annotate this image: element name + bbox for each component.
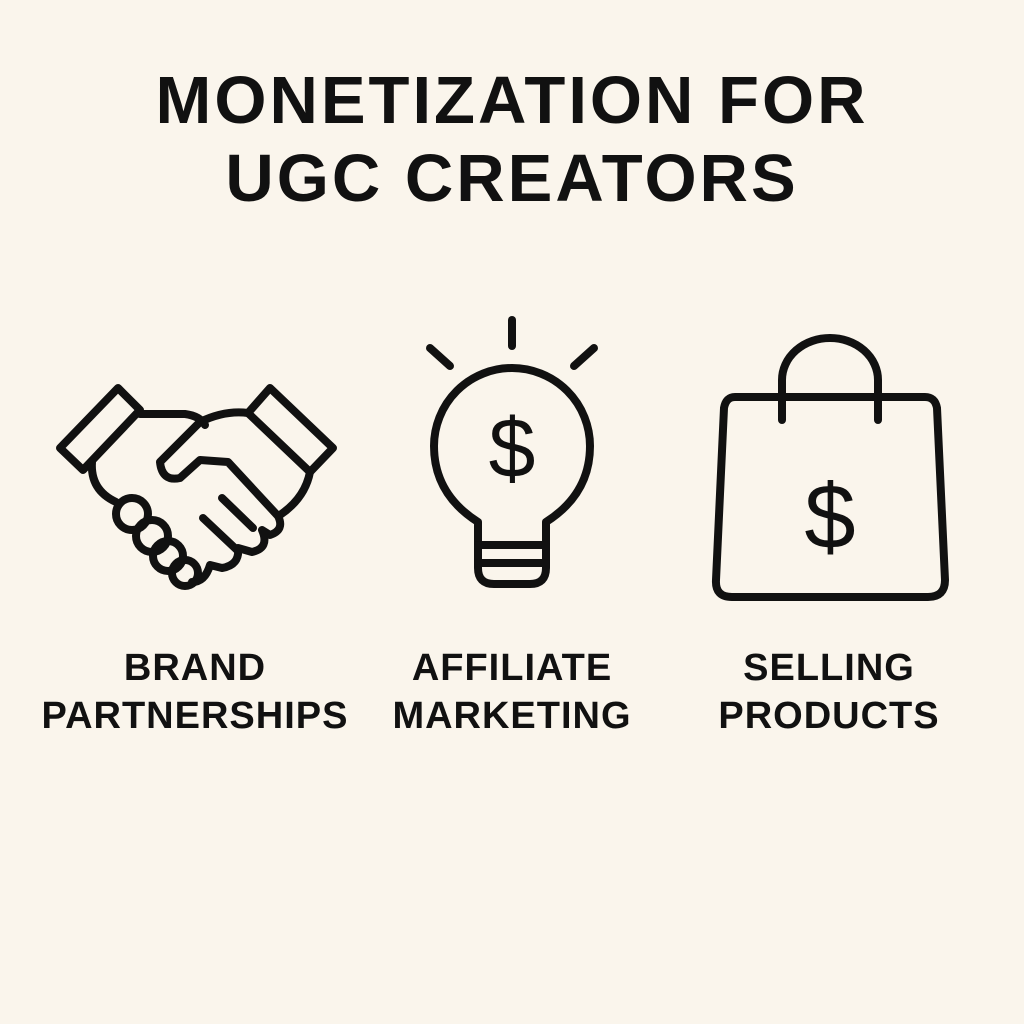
label: affiliate marketing: [392, 647, 632, 737]
dollar sign in bulb: $: [489, 401, 535, 495]
label: selling products: PRODUCTS: [718, 695, 940, 737]
icon: shopping bag with dollar: [716, 338, 945, 597]
label: brand partnerships: [42, 647, 348, 737]
label: affiliate marketing: AFFILIATE: [412, 647, 612, 689]
label: selling products: [718, 647, 940, 737]
label: brand partnerships: BRAND: [124, 647, 266, 689]
label: brand partnerships: PARTNERSHIPS: [42, 695, 348, 737]
icon: handshake: [60, 388, 333, 586]
label: selling products: SELLING: [743, 647, 915, 689]
title: MONETIZATION FOR: [156, 63, 868, 138]
title: UGC CREATORS: [225, 141, 799, 216]
icon: light bulb with dollar: [430, 320, 594, 584]
label: affiliate marketing: MARKETING: [392, 695, 632, 737]
dollar sign in bag: $: [804, 466, 856, 568]
title: [156, 63, 868, 216]
